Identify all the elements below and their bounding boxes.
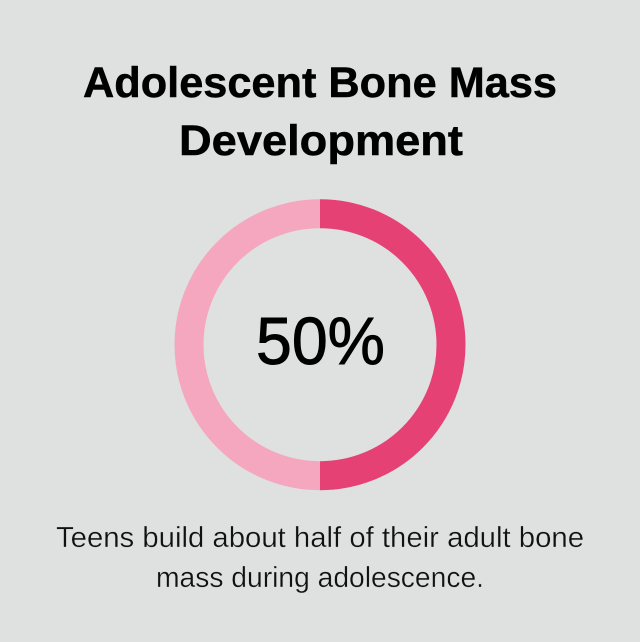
description: Teens build about half of their adult bone <box>56 522 584 554</box>
title: Development <box>179 117 463 165</box>
highlighted segment <box>320 214 451 476</box>
title <box>83 59 557 165</box>
remaining segment <box>189 214 320 476</box>
description: mass during adolescence. <box>156 562 484 594</box>
donut chart: 50% <box>189 214 451 476</box>
center value: 50% <box>256 304 385 379</box>
title: Adolescent Bone Mass <box>83 59 557 107</box>
description <box>56 522 584 594</box>
